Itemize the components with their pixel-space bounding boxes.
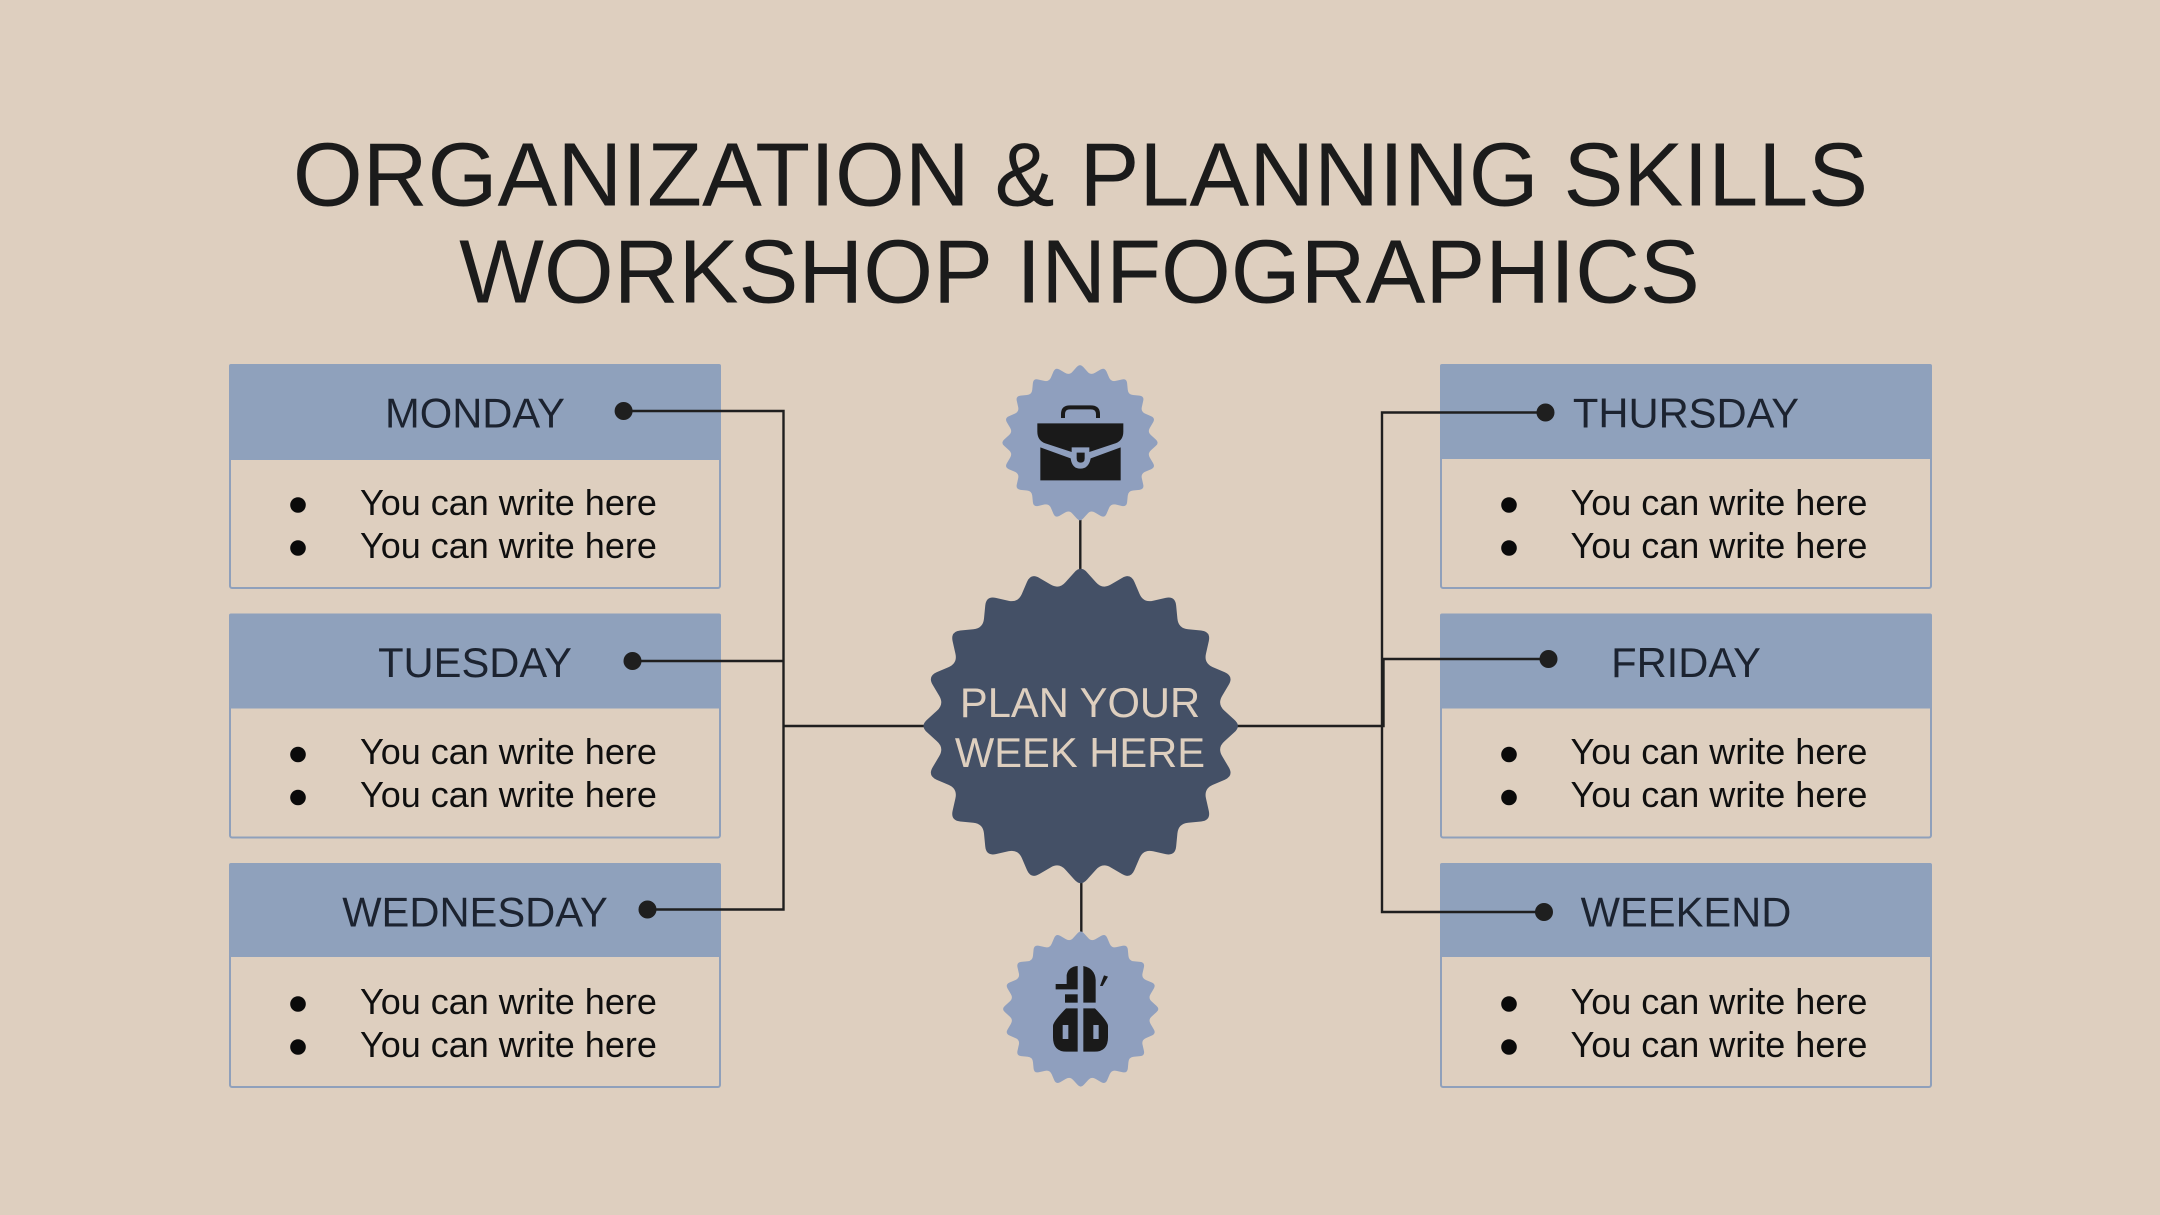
panel: tuesday: [229, 614, 721, 838]
panel: thursday: [1440, 364, 1932, 588]
weekend list: You can write here: [1570, 1024, 1867, 1065]
thursday heading: THURSDAY: [1573, 390, 1799, 436]
icon badge: briefcase: [1002, 365, 1158, 520]
thursday list: You can write here: [1570, 482, 1867, 523]
panel: weekend: [1440, 863, 1932, 1087]
tuesday list: You can write here: [360, 774, 657, 815]
weekend heading: WEEKEND: [1581, 888, 1791, 936]
wednesday list: You can write here: [360, 1024, 657, 1065]
wednesday header: [229, 863, 721, 957]
badge text: [955, 679, 1205, 776]
friday heading: FRIDAY: [1611, 639, 1761, 686]
friday list: [1501, 731, 1867, 815]
thursday list: You can write here: [1570, 525, 1867, 566]
icon: briefcase: [1037, 407, 1123, 480]
thursday list: [1501, 482, 1867, 566]
title: [293, 126, 1868, 322]
tuesday list: You can write here: [360, 731, 657, 772]
monday header: [229, 364, 721, 460]
tuesday header: [229, 614, 721, 708]
thursday header: [1440, 364, 1932, 459]
panel: monday: [229, 364, 721, 588]
panel: friday: [1440, 614, 1932, 838]
top vertical connector: [1079, 518, 1082, 572]
friday list: You can write here: [1570, 774, 1867, 815]
monday list: You can write here: [360, 525, 657, 566]
friday list: You can write here: [1570, 731, 1867, 772]
icon badge: scissors: [1003, 931, 1158, 1087]
panel: wednesday: [229, 863, 721, 1087]
title: WORKSHOP INFOGRAPHICS: [459, 222, 1700, 322]
monday list: [290, 482, 657, 566]
badge shape: [923, 569, 1238, 883]
monday list: You can write here: [360, 482, 657, 523]
icon: scissors: [1053, 966, 1108, 1052]
monday heading: MONDAY: [385, 390, 565, 436]
badge text: WEEK HERE: [955, 729, 1205, 776]
weekend list: [1501, 981, 1867, 1065]
central badge: [923, 569, 1238, 883]
tuesday list: [290, 731, 657, 815]
wednesday list: [290, 981, 657, 1065]
tuesday heading: TUESDAY: [378, 639, 572, 686]
right connector tree: [1230, 404, 1558, 921]
wednesday list: You can write here: [360, 981, 657, 1022]
wednesday heading: WEDNESDAY: [342, 888, 608, 936]
badge text: PLAN YOUR: [960, 679, 1200, 726]
title: ORGANIZATION & PLANNING SKILLS: [293, 126, 1868, 226]
weekend list: You can write here: [1570, 981, 1867, 1022]
weekend header: [1440, 863, 1932, 957]
left connector tree: [615, 402, 930, 918]
friday header: [1440, 614, 1932, 708]
bottom vertical connector: [1080, 880, 1083, 934]
